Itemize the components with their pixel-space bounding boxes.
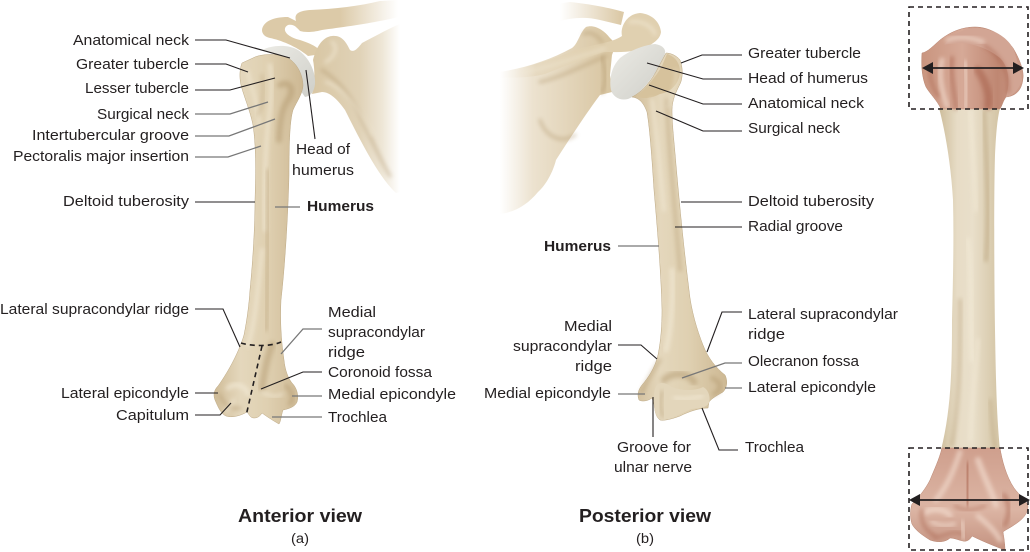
icon: distal end highlighted (910, 448, 1028, 550)
labels: posterior right column: ridge (748, 327, 785, 343)
labels: posterior right column: Anatomical neck (748, 96, 865, 112)
labels: posterior left column: Humerus (544, 239, 611, 255)
labels: anterior left column: Anatomical neck (73, 33, 190, 49)
dashed outline: lines on distal humerus (241, 342, 281, 416)
labels: anterior left column: Lesser tubercle (85, 81, 189, 97)
labels: anterior inner: ridge (328, 345, 365, 361)
labels: anterior inner: Coronoid fossa (328, 365, 433, 381)
icon: head of humerus cartilage (posterior) (610, 44, 665, 100)
labels: anterior inner: Medial (328, 305, 376, 321)
arrow: distal width (909, 494, 1030, 506)
labels: anterior left column: Deltoid tuberosity (63, 194, 190, 210)
leader lines: posterior (618, 55, 742, 450)
labels: posterior right column: Radial groove (748, 219, 843, 235)
labels: anterior left column: Greater tubercle (76, 57, 189, 73)
icon: humerus bone (anterior) (214, 54, 303, 424)
labels: posterior right column: Deltoid tuberosity (748, 194, 875, 210)
labels: anterior left column: Intertubercular groove (32, 128, 189, 144)
labels: anterior inner: Head of (296, 142, 351, 158)
labels: posterior right column: Surgical neck (748, 121, 841, 137)
labels: posterior left column: supracondylar (513, 339, 612, 355)
arrow: proximal width (922, 62, 1024, 74)
labels: posterior right column (745, 46, 898, 456)
labels: anterior left column (0, 33, 190, 424)
labels: posterior right column: Lateral supracondylar (748, 307, 898, 323)
panel: posterior view illustration (500, 2, 727, 420)
callout: dashed box around proximal end (909, 7, 1028, 109)
trochlea (posterior) (654, 383, 710, 420)
labels: posterior left column: ridge (575, 359, 612, 375)
icon: proximal end highlighted (922, 27, 1023, 109)
panel: anterior view illustration (214, 0, 400, 424)
labels: anterior inner: humerus (292, 163, 354, 179)
labels: anterior inner: Trochlea (328, 410, 388, 426)
shaft streaks (952, 112, 995, 447)
labels: posterior left column: Medial epicondyle (484, 386, 611, 402)
labels: posterior right column: Head of humerus (748, 71, 868, 87)
labels: posterior left column (484, 239, 692, 476)
labels: anterior inner (292, 142, 456, 426)
heading: posterior view: Posterior view (579, 506, 712, 526)
labels: anterior left column: Lateral epicondyle (61, 386, 189, 402)
labels: posterior left column: Groove for (617, 440, 691, 456)
labels: anterior left column: Pectoralis major insertion (13, 149, 189, 165)
labels: anterior inner: Humerus (307, 199, 374, 215)
labels: posterior left column: ulnar nerve (614, 460, 692, 476)
labels: anterior left column: Capitulum (116, 408, 189, 424)
labels: anterior left column: Surgical neck (97, 107, 190, 123)
labels: posterior right column: Trochlea (745, 440, 805, 456)
labels: anterior inner: Medial epicondyle (328, 387, 456, 403)
caption: (a): (a) (291, 531, 309, 546)
caption: (b): (b) (636, 531, 654, 546)
icon: clavicle and scapula (posterior) (500, 2, 661, 214)
icon: clavicle and scapula (anterior) (262, 0, 400, 193)
icon: humerus bone (posterior) (632, 53, 727, 420)
leader lines: anterior (195, 40, 322, 417)
callout: dashed box around distal end (909, 448, 1028, 550)
labels: posterior right column: Greater tubercle (748, 46, 861, 62)
labels: anterior left column: Lateral supracondylar ridge (0, 302, 189, 318)
heading: anterior view: Anterior view (238, 506, 363, 526)
icon: humerus shaft (939, 108, 1000, 450)
panel: isolated humerus with highlighted ends (909, 7, 1030, 550)
labels: posterior right column: Olecranon fossa (748, 354, 860, 370)
icon: head of humerus cartilage (anterior) (262, 46, 315, 97)
labels: posterior left column: Medial (564, 319, 612, 335)
labels: anterior inner: supracondylar (328, 325, 425, 341)
labels: posterior right column: Lateral epicondyle (748, 380, 876, 396)
